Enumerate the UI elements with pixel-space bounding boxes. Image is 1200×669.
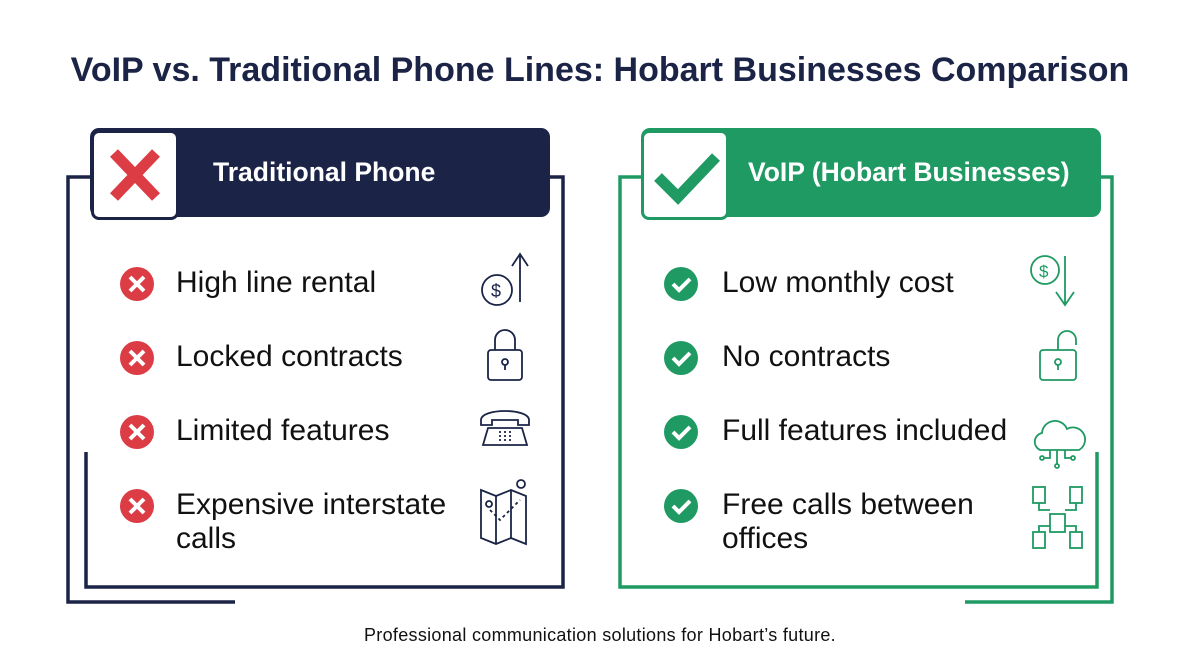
- item 3: [120, 414, 389, 449]
- item 1: [120, 266, 376, 301]
- list: traditional: Locked contracts: [176, 340, 403, 373]
- icon: phone: [481, 411, 529, 445]
- icons: voip: [1030, 255, 1086, 549]
- icons: traditional: [480, 252, 530, 546]
- icon: check: [641, 130, 729, 220]
- icon: lock: [488, 330, 522, 380]
- icon: dollar up: [482, 254, 528, 305]
- header bar: VoIP (Hobart Businesses): [748, 157, 1070, 187]
- icon: dollar down: $: [1039, 262, 1049, 281]
- list: voip: No contracts: [722, 340, 890, 373]
- icon: cloud: [1035, 421, 1085, 468]
- icon: offices: [1033, 487, 1082, 548]
- list: traditional: High line rental: [176, 266, 376, 299]
- list: voip: Free calls between: [722, 488, 974, 521]
- header bar: [641, 128, 1101, 217]
- header bar: [90, 128, 550, 217]
- item 4: [120, 488, 446, 555]
- list: traditional: [120, 266, 446, 555]
- item 2: [120, 340, 403, 375]
- list: traditional: calls: [176, 522, 236, 555]
- icon: red x: [91, 130, 179, 220]
- panel: traditional phone: [66, 128, 565, 604]
- panel: voip: [618, 128, 1114, 604]
- item 3: [664, 414, 1007, 449]
- icon: open lock: [1040, 331, 1076, 380]
- header bar: Traditional Phone: [213, 157, 435, 187]
- item 2: [664, 340, 890, 375]
- icon: dollar up: $: [491, 281, 501, 301]
- item 4: [664, 488, 974, 555]
- list: traditional: Limited features: [176, 414, 389, 447]
- list: voip: [664, 266, 1007, 555]
- item 1: [664, 266, 954, 301]
- list: traditional: Expensive interstate: [176, 488, 446, 521]
- title: VoIP vs. Traditional Phone Lines: Hobart Businesses Comparison: [71, 51, 1129, 89]
- icon: map: [481, 480, 526, 544]
- footer: Professional communication solutions for Hobart’s future.: [364, 625, 836, 645]
- list: voip: Full features included: [722, 414, 1007, 447]
- list: voip: Low monthly cost: [722, 266, 954, 299]
- icon: dollar down: [1031, 256, 1074, 305]
- list: voip: offices: [722, 522, 808, 555]
